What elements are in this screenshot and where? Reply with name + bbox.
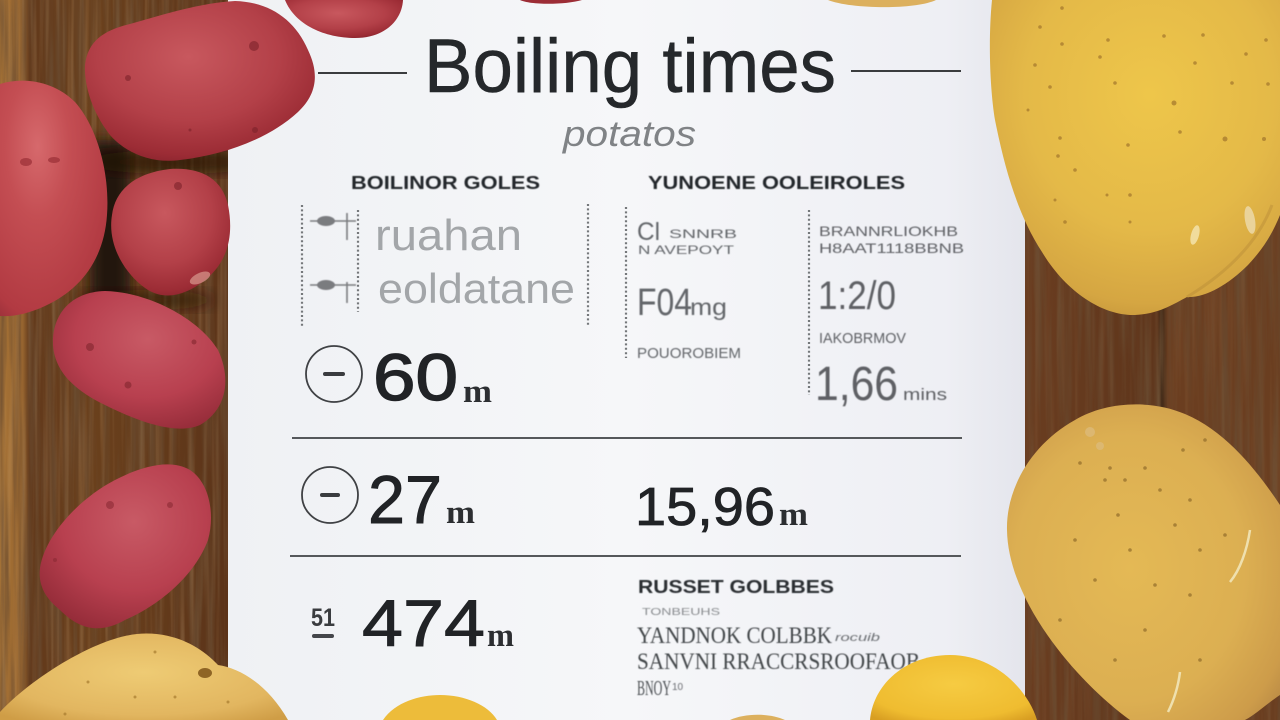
potato: red top tiny — [520, 0, 582, 4]
icon: whisk bottom — [310, 280, 356, 303]
russet details: RUSSET GOLBBES — [638, 577, 834, 597]
russet details — [637, 577, 920, 700]
yukon detail column: mg — [690, 294, 727, 320]
right detail column: H8AAT1118BBNB — [819, 240, 964, 256]
yukon detail column: Cl — [637, 218, 660, 246]
label: ruahan: ruahan — [375, 211, 522, 260]
time row 2 second value: 15,96 m: m — [779, 497, 808, 533]
potato: red large top left — [85, 1, 315, 161]
right detail column: 1,66 — [815, 358, 898, 411]
potato: yellow large lower right — [1007, 404, 1280, 720]
yukon detail column: POUOROBIEM — [637, 345, 741, 362]
right detail column: BRANNRLIOKHB — [819, 223, 958, 239]
potato: red small middle — [111, 169, 230, 295]
russet details: rocuib — [835, 632, 880, 644]
time row 3: 474 m: m — [487, 618, 514, 654]
yukon detail column — [637, 218, 741, 362]
potato: yellow bottom centre — [383, 695, 497, 720]
time row 3: 474 m: 51 — [311, 604, 335, 632]
yukon detail column: N AVEPOYT — [638, 243, 735, 257]
time row 3: 474 m: 474 — [362, 586, 485, 660]
potato: red lower — [40, 464, 211, 628]
time row 1: 60 m: 60 — [373, 340, 458, 414]
russet details: TONBEUHS — [642, 607, 720, 618]
right detail column: mins — [903, 385, 947, 404]
soft shadows under potatoes — [72, 130, 228, 314]
time row 2: 27 m: m — [446, 495, 475, 531]
potato: yellow bottom tiny — [730, 715, 785, 720]
column heading: boiling: BOILINOR GOLES — [351, 173, 540, 193]
russet details: BNOY — [637, 676, 671, 700]
divider 2 — [290, 555, 961, 557]
potato: yellow top tiny — [828, 0, 936, 7]
divider 1 — [292, 437, 962, 439]
potato: bright yellow bottom right — [870, 655, 1037, 720]
right detail column: IAKOBRMOV — [819, 330, 906, 347]
icon: whisk top — [310, 213, 356, 240]
potato: yellow large top right — [990, 0, 1280, 315]
subtitle: potatos — [562, 113, 696, 154]
time row 1: 60 m — [306, 340, 492, 414]
right detail column — [815, 223, 964, 411]
label: eoldatane: eoldatane — [378, 265, 575, 312]
time row 2: 27 m: 27 — [368, 462, 442, 538]
right detail column: 1:2/0 — [818, 274, 896, 318]
russet details: 10 — [672, 682, 684, 693]
dotted column separators — [302, 204, 809, 395]
time row 2: 27 m — [302, 462, 475, 538]
yukon detail column: SNNRB — [669, 227, 737, 241]
potato: red far left — [0, 81, 107, 316]
time row 1: 60 m: m — [463, 374, 492, 410]
column heading: yukon: YUNOENE OOLEIROLES — [648, 173, 905, 193]
time row 3: 474 m — [311, 586, 514, 660]
russet details: SANVNI RRACCRSROOFAOB — [637, 649, 920, 674]
potato: yellow bottom left — [0, 634, 288, 720]
yukon detail column: F04 — [637, 282, 692, 324]
russet details: YANDNOK COLBBK — [637, 623, 832, 648]
title: Boiling times — [424, 24, 836, 109]
potato: red tilted — [53, 291, 225, 429]
paper sheet — [228, 0, 1025, 720]
potato: red top — [285, 0, 403, 38]
time row 2 second value: 15,96 m: 15,96 — [635, 477, 775, 537]
